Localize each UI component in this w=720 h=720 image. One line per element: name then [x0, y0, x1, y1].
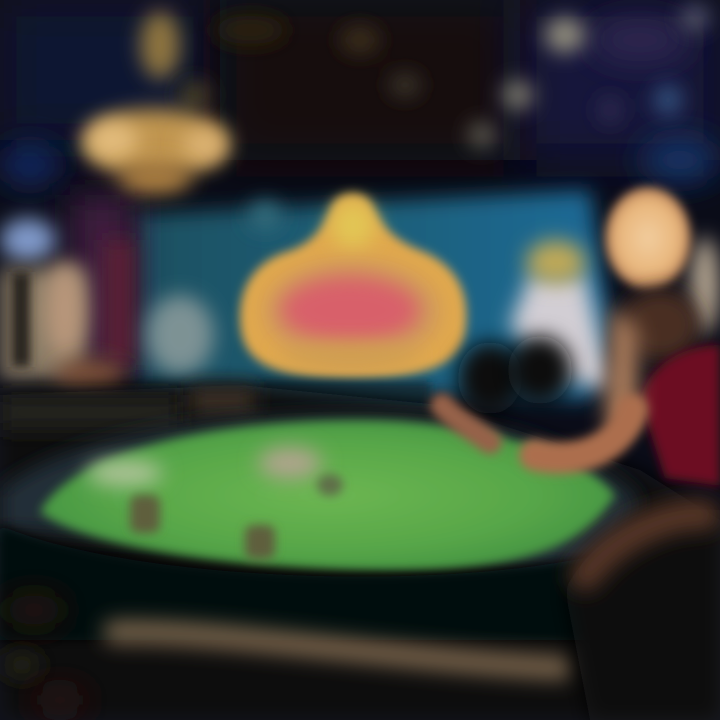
- chandelier: [83, 11, 227, 194]
- dim left rail: [0, 395, 180, 430]
- foreground arm: [565, 509, 720, 720]
- ceiling lights: [214, 5, 709, 148]
- right slot machine: [510, 237, 720, 390]
- stage sign: [240, 194, 467, 378]
- gold rail: [2, 594, 560, 712]
- round lamp: [605, 187, 691, 289]
- green felt: [40, 420, 615, 571]
- stage base: [262, 382, 430, 416]
- player: head and red shirt: [442, 289, 720, 486]
- cards and chips: [87, 447, 343, 559]
- table rim: [0, 415, 640, 570]
- purple left wall: [70, 195, 135, 370]
- table band: [0, 385, 720, 720]
- black table edge: [0, 525, 620, 640]
- teal back wall: [135, 190, 610, 400]
- left slot machines: [0, 218, 126, 391]
- pale shapes beside the sign: [146, 201, 281, 375]
